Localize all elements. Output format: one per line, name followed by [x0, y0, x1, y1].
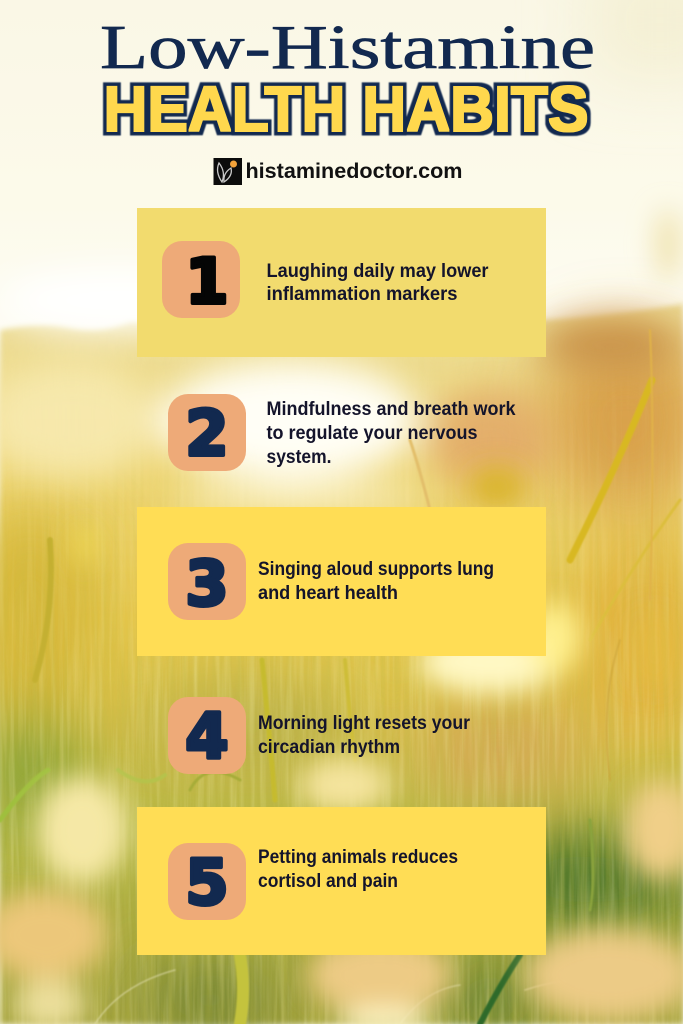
logo and website — [214, 158, 462, 185]
number badge 2 — [168, 394, 246, 471]
panel: habit 4 — [168, 697, 475, 774]
text: laughing: Laughing daily may lower — [266, 261, 489, 282]
website name: histaminedoctor.com — [246, 160, 462, 183]
panel: habit 1 — [137, 208, 546, 357]
text: morning light: circadian rhythm — [258, 737, 400, 758]
panel: habit 5 — [137, 807, 546, 955]
grass blades — [0, 330, 680, 1024]
number badge 3 — [168, 543, 246, 620]
bokeh light spots — [0, 209, 683, 1024]
title: Low-Histamine: Low-Histamine — [100, 14, 595, 82]
text: mindfulness: to regulate your nervous — [266, 423, 478, 444]
text: laughing: inflammation markers — [266, 284, 458, 305]
panel: habit 2 — [168, 394, 521, 471]
number badge 2: 2 — [185, 397, 229, 470]
text: morning light: Morning light resets your — [258, 713, 471, 734]
number badge 1: 1 — [185, 245, 229, 318]
number badge 3: 3 — [185, 547, 229, 620]
number badge 1 — [162, 241, 240, 318]
title: Health Habits: HEALTH HABITS — [104, 73, 588, 145]
icon: leaf logo — [214, 158, 242, 185]
text: petting: cortisol and pain — [258, 871, 398, 892]
panel: habit 3 — [137, 507, 546, 656]
text: petting: Petting animals reduces — [258, 847, 458, 868]
number badge 4 — [168, 697, 246, 774]
text: mindfulness: system. — [266, 447, 332, 468]
number badge 5: 5 — [185, 846, 229, 919]
grass texture — [0, 464, 683, 1024]
text: mindfulness: Mindfulness and breath work — [266, 399, 516, 420]
text: singing: Singing aloud supports lung — [258, 559, 494, 580]
text: singing: and heart health — [258, 583, 398, 604]
number badge 4: 4 — [185, 700, 229, 773]
number badge 5 — [168, 843, 246, 920]
